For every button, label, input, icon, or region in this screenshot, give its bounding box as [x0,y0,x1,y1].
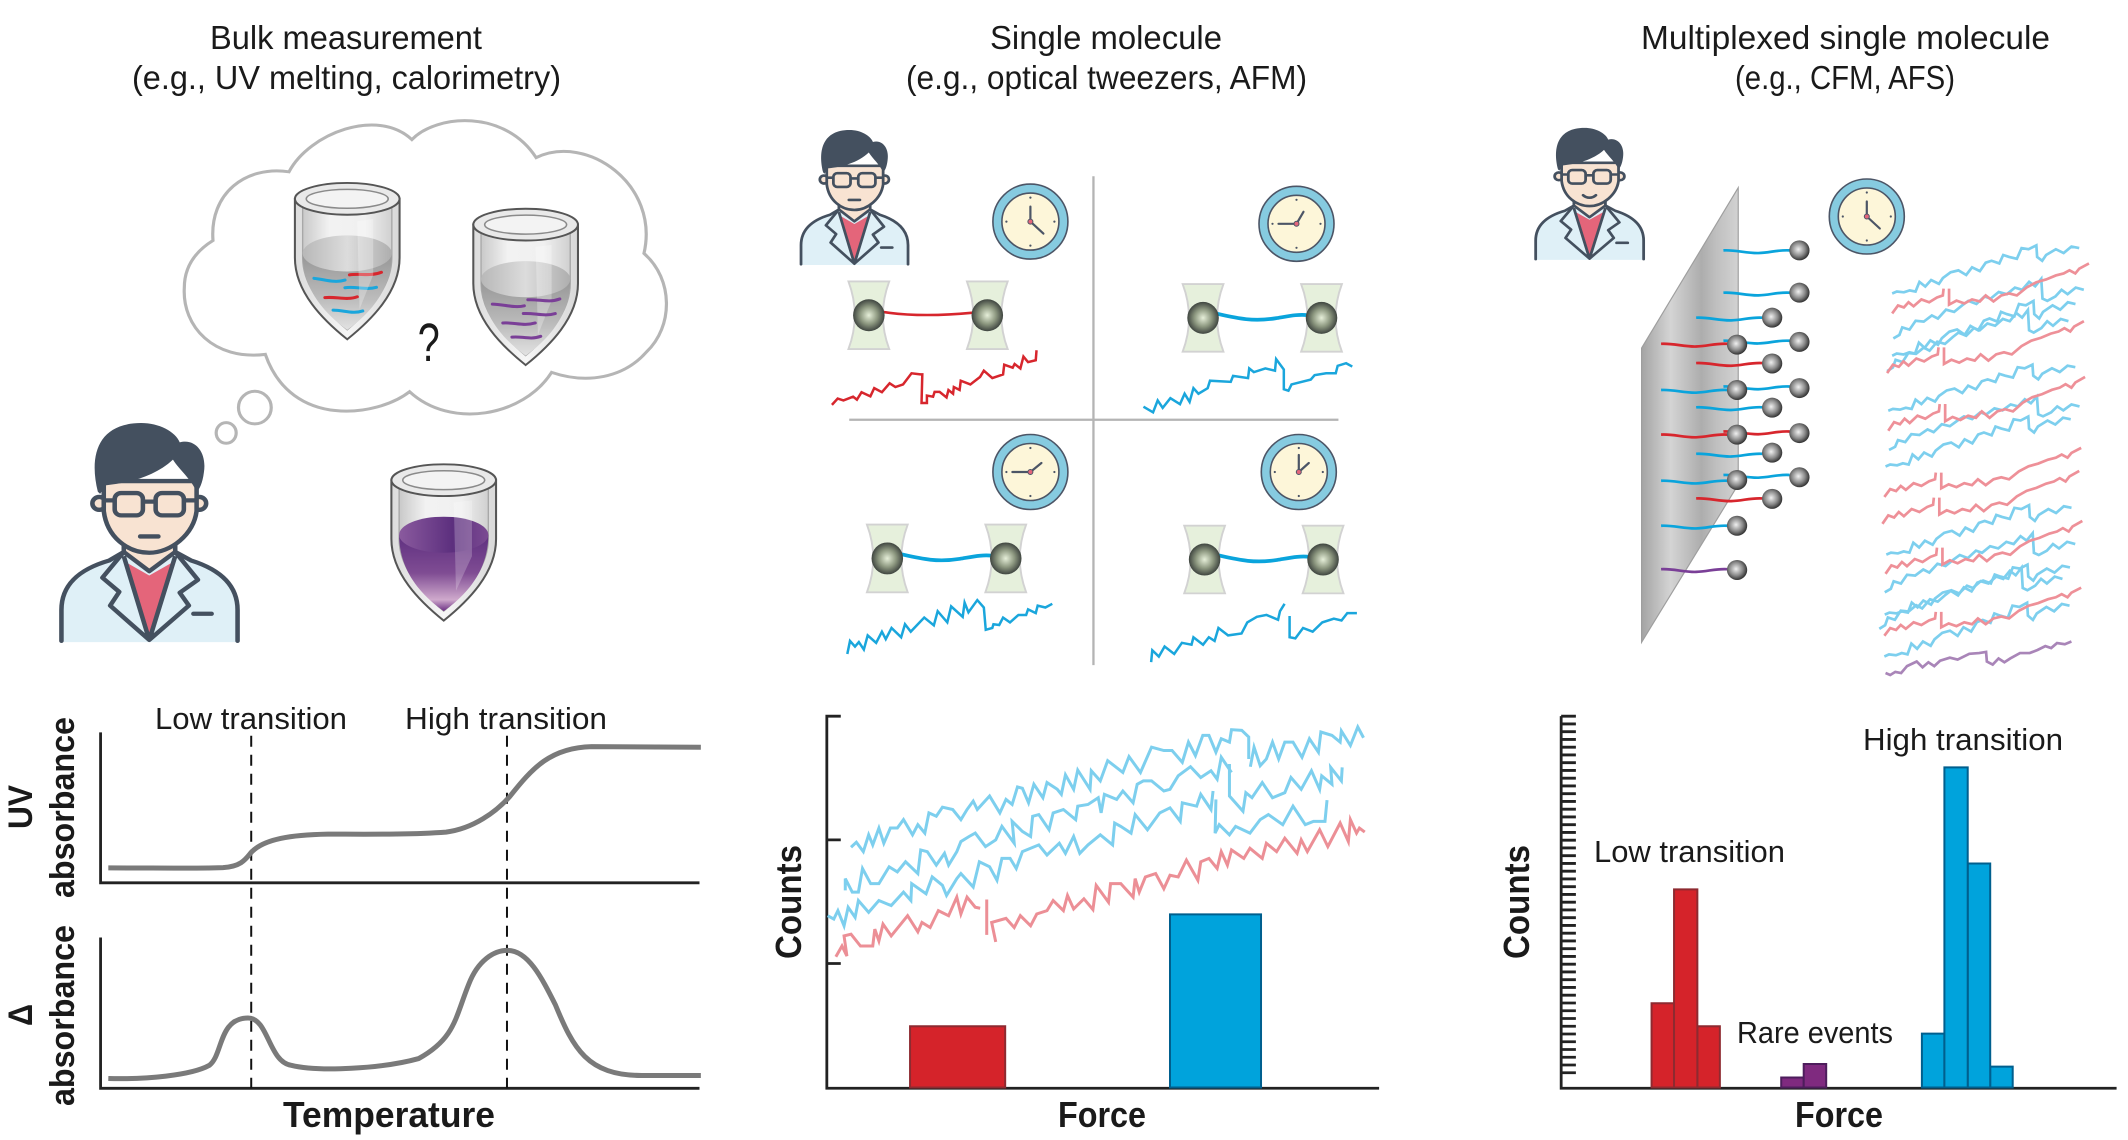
title: bulk measurement [132,19,561,96]
icon: clock 3 [993,434,1068,510]
tweezers: red top left [848,281,1008,349]
axes and ticks [1561,716,2117,1088]
icon: clock 1 [993,184,1068,259]
axis label: delta absorbance: absorbance [44,925,82,1106]
axis label: force: Force [1058,1094,1146,1135]
axes [827,716,1379,1088]
transition markers [251,736,507,1088]
flow cell surface [1642,188,1738,642]
force traces [832,350,1357,662]
axis label: force multiplexed: Force [1795,1094,1883,1135]
thought bubbles [216,391,271,443]
icon: scientist large [61,423,238,642]
bar: high transition [1170,914,1261,1088]
axes [101,732,699,1088]
axis label: delta absorbance: Δ [2,1004,40,1026]
tube: purple strands [473,209,578,365]
icon: clock multiplexed [1829,179,1904,254]
axis label: UV absorbance: UV [2,785,40,829]
axis label: counts: Counts [768,845,809,959]
title: bulk measurement: Bulk measurement [210,19,482,56]
title: bulk measurement: (e.g., UV melting, calorimetry) [132,59,561,96]
question mark: ? [418,313,440,373]
axis label: counts multiplexed: Counts [1496,845,1537,959]
title: multiplexed single molecule: (e.g., CFM, AFS) [1735,59,1955,96]
title: single molecule: (e.g., optical tweezers, AFM) [906,59,1307,96]
curve: delta absorbance [108,950,701,1079]
tube: purple solution [391,464,496,621]
icon: clock 2 [1259,186,1334,261]
axis label: UV absorbance [2,717,82,898]
icon: scientist single molecule [801,130,908,265]
tweezers: blue bottom right [1184,526,1343,593]
axis label: UV absorbance: absorbance [44,717,82,898]
title: multiplexed single molecule [1641,19,2050,96]
label: low transition: Low transition [155,701,347,736]
panel: multiplexed single molecule illustration [1642,188,2089,675]
icon: scientist multiplexed [1536,128,1644,260]
bars: low transition [1652,889,1720,1088]
panel: bulk measurement illustration [61,121,666,642]
chart: multiplexed histogram [1561,716,2117,1088]
icon: clock 4 [1261,434,1336,510]
tweezers: blue bottom left [867,525,1026,592]
axis label: delta absorbance [2,925,82,1106]
bar: low transition [910,1026,1005,1088]
title: multiplexed single molecule: Multiplexed single molecule [1641,19,2050,56]
quadrant dividers [849,176,1338,665]
label: high transition histogram: High transition [1863,722,2063,757]
bars: rare events [1781,1064,1826,1088]
label: low transition histogram: Low transition [1594,834,1785,869]
overlaid traces [828,727,1365,957]
label: rare events: Rare events [1737,1015,1893,1050]
tweezers: blue top right [1183,284,1342,352]
tube: separated red and blue strands [295,183,400,339]
axis label: temperature: Temperature [283,1094,495,1135]
title: single molecule [906,19,1307,96]
multiplexed force traces [1879,245,2089,675]
curve: UV absorbance [108,747,701,868]
tethered molecules [1661,240,1810,580]
chart: single molecule histogram [827,716,1379,1088]
thought cloud [184,121,666,414]
label: high transition: High transition [405,701,607,736]
panel: single molecule illustration [832,176,1357,665]
chart: UV absorbance and delta absorbance vs temperature [101,732,701,1088]
bars: high transition [1922,767,2013,1088]
title: single molecule: Single molecule [990,19,1222,56]
